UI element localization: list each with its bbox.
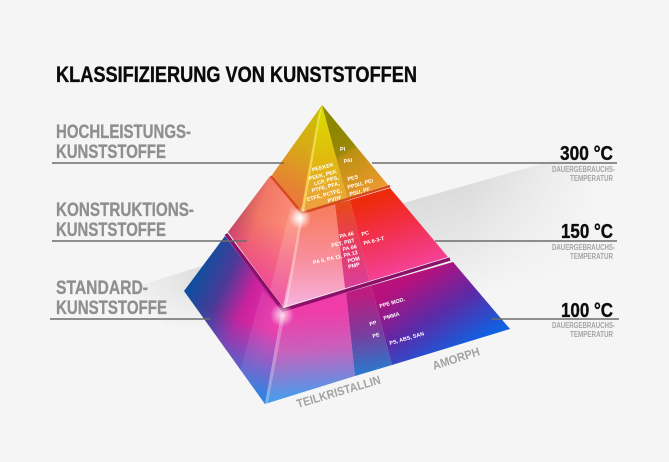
temperature: 150 °C: TEMPERATUR [570, 252, 613, 261]
polymer list: standard, semi-crystalline [369, 320, 381, 340]
label: Hochleistungskunststoffe [56, 122, 191, 163]
polymer list: high performance, semi-crystalline: PEEKEK [312, 162, 335, 174]
temperature: 300 °C: 300 °C [560, 143, 613, 165]
polymer list: engineering, semi-crystalline: PA 6, PA 11, PA 12 [312, 250, 358, 266]
polymer list: standard, amorphous: PMMA [383, 312, 400, 322]
polymer list: engineering, semi-crystalline: POM [347, 256, 361, 265]
temperature: 300 °C [552, 143, 615, 183]
polymer list: high performance, amorphous: PSU, PF [349, 187, 371, 198]
tier: standard plastics [184, 236, 510, 404]
polymer list: high performance, semi-crystalline: LCP, PPS, [313, 175, 340, 187]
polymer list: high performance, amorphous: PES [347, 174, 359, 183]
polymer list: high performance, semi-crystalline: PTFE, PFA, [311, 181, 341, 194]
temperature: 100 °C: DAUERGEBRAUCHS- [552, 321, 615, 330]
label: Konstruktionskunststoffe: KONSTRUKTIONS- [56, 200, 194, 221]
polymer list: high performance, amorphous: PPSU, PEI [347, 178, 374, 191]
rim between upper tiers [271, 176, 390, 213]
temperature: 150 °C [552, 221, 615, 261]
polymer list: engineering, semi-crystalline: PMP [348, 262, 361, 271]
polymer list: high performance, amorphous: PI [340, 147, 346, 153]
temperature: 150 °C: 150 °C [561, 221, 613, 243]
polymer list: standard, amorphous [379, 297, 425, 347]
axis label: Teilkristallin: TEILKRISTALLIN [295, 373, 382, 411]
polymer list: engineering, amorphous [361, 230, 386, 247]
polymer list: high performance, semi-crystalline [306, 162, 343, 205]
polymer list: high performance, amorphous [340, 147, 374, 198]
temperature: 100 °C: 100 °C [561, 300, 613, 322]
polymer list: high performance, semi-crystalline: ETFE, PCTFE, [306, 188, 343, 203]
polymer list: standard, semi-crystalline: PE [372, 332, 381, 340]
label: Hochleistungskunststoffe: KUNSTSTOFFE [56, 142, 166, 163]
tier: engineering plastics [228, 176, 448, 307]
temperature: 300 °C: DAUERGEBRAUCHS- [552, 165, 615, 174]
polymer list: high performance, semi-crystalline: PEEK, PEK [308, 169, 338, 182]
label: Standardkunststoffe: KUNSTSTOFFE [56, 298, 167, 319]
polymer list: engineering, semi-crystalline: PA 66 [342, 244, 357, 253]
temperature: 150 °C: DAUERGEBRAUCHS- [552, 243, 615, 252]
highlights at front ridge [270, 207, 311, 327]
rim between lower tiers [226, 234, 450, 310]
title: KLASSIFIZIERUNG VON KUNSTSTOFFEN [56, 62, 417, 87]
polymer list: high performance, semi-crystalline: PVDF [327, 195, 343, 205]
label: Konstruktionskunststoffe: KUNSTSTOFFE [56, 220, 166, 241]
polymer list: engineering, semi-crystalline [312, 231, 361, 271]
polymer list: standard, semi-crystalline: PP [369, 320, 378, 328]
label: Standardkunststoffe: STANDARD- [56, 278, 148, 299]
tier: high performance plastics [272, 105, 388, 212]
temperature: 300 °C: TEMPERATUR [570, 174, 613, 183]
polymer list: engineering, amorphous: PA 6-3-T [363, 236, 386, 247]
cast shadow behind pyramid [120, 130, 650, 360]
polymer list: engineering, semi-crystalline: PET, PBT [331, 238, 356, 249]
temperature: 100 °C: TEMPERATUR [570, 330, 613, 339]
polymer list: engineering, semi-crystalline: PA 46 [339, 231, 354, 240]
label: Standardkunststoffe [56, 278, 167, 319]
polymer list: standard, amorphous: PPE MOD. [379, 297, 406, 310]
polymer list: standard, amorphous: PS, ABS, SAN [389, 331, 425, 347]
temperature: 100 °C [552, 300, 615, 339]
axis label: Amorph: AMORPH [431, 344, 482, 373]
label: Hochleistungskunststoffe: HOCHLEISTUNGS- [56, 122, 191, 143]
pyramid [184, 105, 510, 404]
polymer list: high performance, amorphous: PAI [343, 158, 353, 165]
label: Konstruktionskunststoffe [56, 200, 194, 241]
polymer list: engineering, amorphous: PC [361, 230, 370, 238]
leader lines [50, 163, 619, 319]
